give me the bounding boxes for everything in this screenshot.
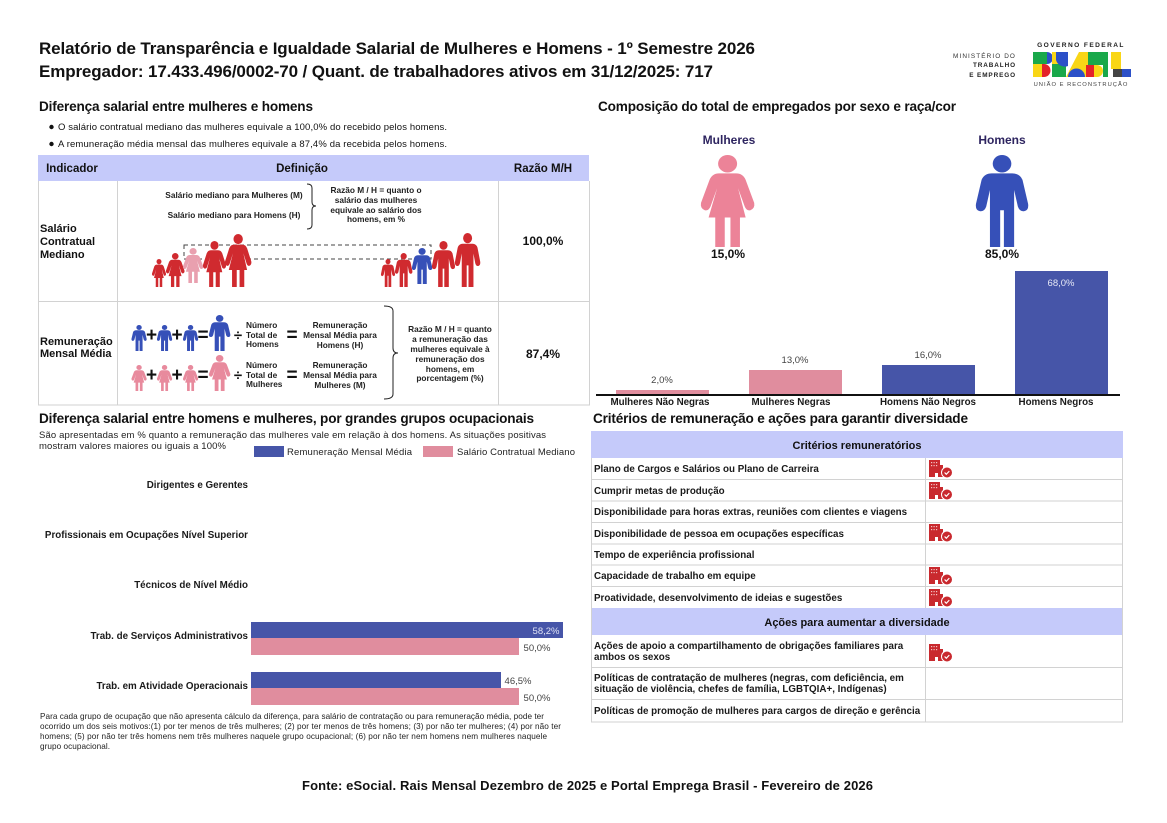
panel: homens share: 85,0% (985, 247, 1019, 261)
heading: grupos ocupacionais: Diferença salarial entre homens e mulheres, por grandes grupos ocupacionais (39, 411, 534, 426)
row: remuneração mensal média (40, 306, 560, 399)
bar chart: composição por sexo e raça (596, 271, 1120, 408)
criteria rows: Plano de Cargos e Salários ou Plano de Carreira (594, 464, 819, 475)
header: ações para diversidade (591, 608, 1123, 635)
table header: Razão M/H (514, 163, 572, 175)
panel: mulheres share: Mulheres (703, 133, 756, 147)
row: remuneração mensal média: Homens (246, 339, 279, 349)
row: remuneração mensal média: Remuneração (313, 320, 367, 330)
row: remuneração mensal média: Total de (246, 330, 278, 340)
row: remuneração mensal média: + (171, 365, 183, 386)
bar chart: grupos ocupacionais: Técnicos de Nível Médio (134, 580, 248, 591)
logo: Governo Federal Brasil (1033, 42, 1131, 88)
row: remuneração mensal média: Mensal Média para (303, 370, 377, 380)
row: remuneração mensal média: Número (246, 360, 277, 370)
row: salário contratual mediano: 100,0% (523, 234, 564, 248)
heading: critérios: Critérios de remuneração e ações para garantir diversidade (593, 411, 968, 426)
panel: critérios table (591, 431, 1123, 722)
panel: homens share: Homens (978, 133, 1026, 147)
criteria rows (594, 464, 908, 604)
row: remuneração mensal média: Remuneração (40, 336, 113, 348)
bar chart: grupos ocupacionais: Trab. em Atividade Operacionais (96, 681, 249, 692)
row: remuneração mensal média: Número (246, 320, 277, 330)
bullets: summary statements: A remuneração média mensal das mulheres equivale a 87,4% da recebida pelos homens. (58, 139, 447, 150)
row: salário contratual mediano: homens, em % (347, 214, 406, 224)
bar chart: grupos ocupacionais: 46,5% (505, 676, 532, 687)
panel: mulheres share: 15,0% (711, 247, 745, 261)
panel: homens share (976, 133, 1028, 261)
logo: Ministério do Trabalho e Emprego: TRABALHO (973, 62, 1016, 69)
row: remuneração mensal média: Mulheres (M) (314, 380, 366, 390)
row: salário contratual mediano: equivale ao salário dos (330, 205, 422, 215)
row: remuneração mensal média: Mensal Média (40, 348, 112, 360)
panel: indicator table (38, 155, 590, 405)
criteria rows: Disponibilidade para horas extras, reuniões com clientes e viagens (594, 507, 908, 518)
icons: criterion adopted (929, 460, 953, 662)
legend: Salário Contratual Mediano (457, 447, 575, 458)
text: explicação do gráfico: mostram valores maiores ou iguais a 100% (39, 441, 227, 452)
bar chart: composição por sexo e raça: 13,0% (782, 355, 809, 366)
row: remuneração mensal média: Razão M / H = quanto (408, 324, 492, 334)
row: remuneração mensal média: a remuneração das (412, 334, 488, 344)
logo: Ministério do Trabalho e Emprego: MINISTÉRIO DO (953, 51, 1016, 60)
footnote: homens; (5) por não ter três homens nem três mulheres naquele grupo ocupacional; (6) por não ter nem homens nem mulheres naquele (40, 732, 547, 741)
row: salário contratual mediano: salário das mulheres (335, 195, 418, 205)
row: remuneração mensal média: = (197, 325, 209, 346)
row: salário contratual mediano: Salário (40, 223, 77, 235)
row: remuneração mensal média: = (286, 365, 298, 386)
footnote: Para cada grupo de ocupação que não apresenta cálculo da diferença, para salário de contratação ou para remuneração média, pode ter (40, 712, 544, 721)
table header: Indicador (46, 163, 98, 175)
row: remuneração mensal média: Homens (H) (317, 340, 364, 350)
source line: Fonte: eSocial. Rais Mensal Dezembro de 2025 e Portal Emprega Brasil - Fevereiro de 2026 (302, 778, 873, 793)
text: explicação do gráfico: São apresentadas em % quanto a remuneração das mulheres vale em relação à dos homens. As situações positivas (39, 430, 546, 441)
heading: composição: Composição do total de empregados por sexo e raça/cor (598, 99, 957, 114)
action rows: Ações de apoio a compartilhamento de obrigações familiares para (594, 641, 904, 652)
bar chart: grupos ocupacionais (45, 480, 563, 705)
bar chart: composição por sexo e raça: Homens Não Negros (880, 397, 977, 408)
heading: diferença salarial: Diferença salarial entre mulheres e homens (39, 99, 313, 114)
title: Empregador: 17.433.496/0002-70 / Quant. de trabalhadores ativos em 31/12/2025: 717 (39, 62, 713, 81)
bar chart: grupos ocupacionais: 58,2% (533, 626, 560, 637)
row: remuneração mensal média: ÷ (234, 367, 242, 384)
action rows: situação de violência, chefes de família, LGBTQIA+, Indígenas) (594, 684, 887, 695)
logo: Ministério do Trabalho e Emprego (953, 51, 1016, 79)
action rows: ambos os sexos (594, 652, 671, 663)
bullets: summary statements (49, 122, 447, 150)
bar chart: grupos ocupacionais: 50,0% (524, 643, 551, 654)
header: ações para diversidade: Ações para aumentar a diversidade (764, 617, 950, 629)
table header (38, 155, 589, 181)
row: remuneração mensal média: Mensal Média para (303, 330, 377, 340)
bar chart: composição por sexo e raça: Mulheres Negras (752, 397, 831, 408)
header: critérios remuneratórios: Critérios remuneratórios (793, 440, 921, 452)
bar chart: grupos ocupacionais: Trab. de Serviços Administrativos (90, 631, 249, 642)
bullets: summary statements: O salário contratual mediano das mulheres equivale a 100,0% do recebido pelos homens. (58, 122, 447, 133)
row: remuneração mensal média: Remuneração (313, 360, 367, 370)
table header: Definição (276, 163, 328, 175)
footnote: ocorrido um dos seis motivos:(1) por ter menos de três mulheres; (2) por ter menos de três homens; (3) por não ter mulheres; (4) por não ter (40, 722, 561, 731)
row: salário contratual mediano: Razão M / H = quanto o (330, 185, 422, 195)
row: salário contratual mediano: Salário mediano para Mulheres (M) (165, 190, 303, 200)
bar chart: grupos ocupacionais: Profissionais em Ocupações Nível Superior (45, 530, 248, 541)
criteria rows: Disponibilidade de pessoa em ocupações específicas (594, 529, 844, 540)
criteria rows: Proatividade, desenvolvimento de ideias e sugestões (594, 593, 843, 604)
logo: Governo Federal Brasil: GOVERNO FEDERAL (1037, 42, 1125, 49)
row: salário contratual mediano: Salário mediano para Homens (H) (168, 210, 301, 220)
bar chart: grupos ocupacionais: 50,0% (524, 693, 551, 704)
bar chart: composição por sexo e raça: Homens Negros (1018, 397, 1094, 408)
bar chart: composição por sexo e raça: 16,0% (915, 350, 942, 361)
row: remuneração mensal média: + (146, 365, 157, 386)
criteria rows: Cumprir metas de produção (594, 486, 725, 497)
row: salário contratual mediano (40, 184, 564, 287)
row: remuneração mensal média: Total de (246, 370, 278, 380)
action rows (594, 641, 921, 717)
criteria rows: Tempo de experiência profissional (594, 550, 755, 561)
row: remuneração mensal média: homens, em (426, 364, 474, 374)
row: salário contratual mediano: Contratual (40, 236, 95, 248)
title: Relatório de Transparência e Igualdade Salarial de Mulheres e Homens - 1º Semestre 2026 (39, 39, 755, 58)
row: remuneração mensal média: 87,4% (526, 347, 560, 361)
text: explicação do gráfico (39, 430, 546, 452)
row: remuneração mensal média: Mulheres (246, 379, 283, 389)
bar chart: composição por sexo e raça: 68,0% (1048, 278, 1075, 289)
title (39, 39, 755, 81)
row: remuneração mensal média: + (171, 325, 183, 346)
criteria rows: Capacidade de trabalho em equipe (594, 571, 756, 582)
legend (254, 446, 575, 458)
footnote (40, 712, 561, 751)
row: remuneração mensal média: porcentagem (%) (416, 373, 484, 383)
logo: Governo Federal Brasil: UNIÃO E RECONSTRUÇÃO (1034, 81, 1128, 88)
action rows: Políticas de contratação de mulheres (negras, com deficiência, em (594, 673, 904, 684)
bar chart: composição por sexo e raça: Mulheres Não Negras (610, 397, 710, 408)
row: remuneração mensal média: ÷ (234, 327, 242, 344)
panel: mulheres share (701, 133, 756, 261)
row: remuneração mensal média: = (286, 325, 298, 346)
row: remuneração mensal média: = (197, 365, 209, 386)
action rows: Políticas de promoção de mulheres para cargos de direção e gerência (594, 706, 921, 717)
bar chart: grupos ocupacionais: Dirigentes e Gerentes (147, 480, 249, 491)
row: remuneração mensal média: mulheres equivale à (410, 344, 490, 354)
bar chart: composição por sexo e raça: 2,0% (651, 375, 673, 386)
legend: Remuneração Mensal Média (287, 447, 413, 458)
row: remuneração mensal média: remuneração dos (415, 354, 485, 364)
row: salário contratual mediano: Mediano (40, 249, 85, 261)
row: remuneração mensal média: + (146, 325, 157, 346)
header: critérios remuneratórios (591, 431, 1123, 458)
logo: Ministério do Trabalho e Emprego: E EMPREGO (969, 72, 1016, 79)
footnote: grupo ocupacional. (40, 742, 110, 751)
